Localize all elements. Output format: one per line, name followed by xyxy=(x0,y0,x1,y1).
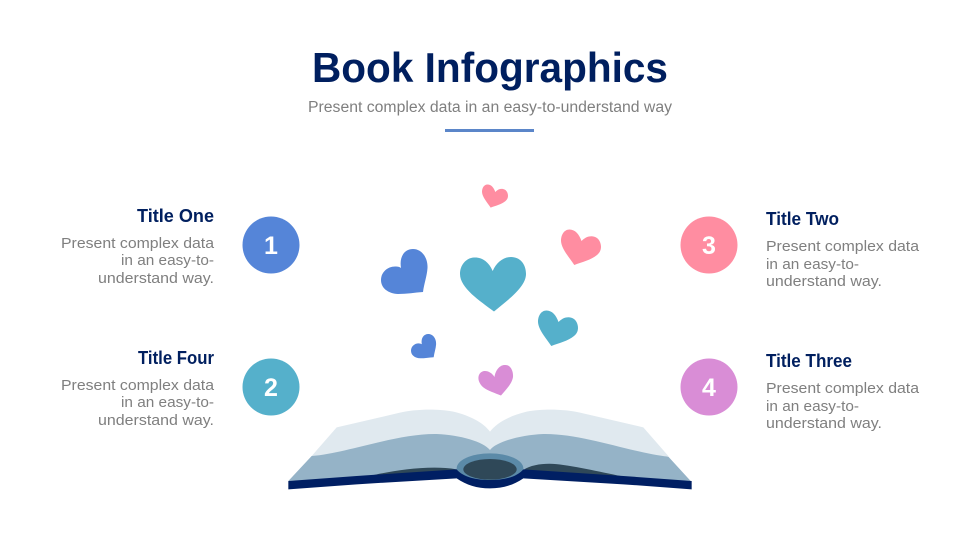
item: Title Two xyxy=(680,209,920,290)
book cover xyxy=(288,469,692,489)
middle pages xyxy=(288,434,691,481)
title: Book Infographics xyxy=(312,44,668,91)
badge 3 xyxy=(680,216,738,274)
text: Title Four description: Present complex data xyxy=(61,377,215,394)
open book xyxy=(288,410,692,489)
badge 1: 1 xyxy=(264,232,278,260)
item: Title Four xyxy=(61,348,300,429)
title underline xyxy=(445,129,534,132)
text: Title Two description: Present complex data xyxy=(766,238,920,255)
text: Title One description: understand way. xyxy=(98,270,214,287)
text: Title Two description: in an easy-to- xyxy=(766,256,859,273)
icon: right pink heart xyxy=(561,230,601,265)
badge 4 xyxy=(680,358,738,416)
badge 1 xyxy=(242,216,300,274)
icon: top pink heart xyxy=(482,184,508,208)
item: Title Three xyxy=(680,351,920,432)
badge 2 xyxy=(242,358,300,416)
spine hollow xyxy=(463,459,517,480)
text: Title One description xyxy=(61,235,215,287)
text: Title Three description: Present complex data xyxy=(766,380,920,397)
text: Title One description: Present complex data xyxy=(61,235,215,252)
text: Title Three description: in an easy-to- xyxy=(766,398,859,415)
text: Title Four description: in an easy-to- xyxy=(121,394,214,411)
icon: small blue heart xyxy=(411,334,436,358)
text: Title Three description: understand way. xyxy=(766,415,882,432)
top pages xyxy=(312,410,668,470)
item: Title One xyxy=(61,206,300,287)
icon: large blue heart xyxy=(381,249,428,294)
hearts xyxy=(381,184,601,396)
text: Title Two description xyxy=(766,238,920,290)
heading: Title Two: Title Two xyxy=(766,209,839,229)
heading: Title Three: Title Three xyxy=(766,351,852,371)
text: Title Three description xyxy=(766,380,920,432)
text: Title Four description: understand way. xyxy=(98,412,214,429)
icon: small teal heart xyxy=(538,310,578,346)
spine arch xyxy=(457,453,523,483)
badge 2: 2 xyxy=(264,374,278,402)
badge 4: 4 xyxy=(702,374,716,402)
heading: Title One: Title One xyxy=(137,206,214,226)
icon: purple heart xyxy=(478,365,513,396)
text: Title Four description xyxy=(61,377,215,429)
heading: Title Four: Title Four xyxy=(138,348,214,368)
subtitle: Present complex data in an easy-to-understand way xyxy=(308,99,672,116)
dark inner pages xyxy=(370,464,633,478)
badge 3: 3 xyxy=(702,232,716,260)
text: Title Two description: understand way. xyxy=(766,273,882,290)
text: Title One description: in an easy-to- xyxy=(121,252,214,269)
icon: large teal heart xyxy=(460,257,526,312)
